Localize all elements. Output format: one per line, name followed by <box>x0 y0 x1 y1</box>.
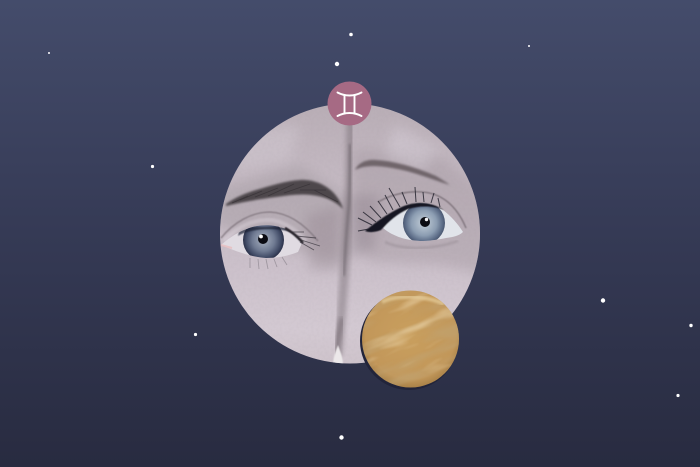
nose highlight <box>333 345 343 365</box>
skin shading <box>215 125 490 275</box>
right upper lash line <box>365 203 444 232</box>
venus planet <box>360 290 459 390</box>
left eye <box>221 212 320 269</box>
left brow <box>226 180 343 209</box>
skin grain <box>215 100 485 370</box>
center crease <box>336 118 351 360</box>
photo circle: two faces <box>215 100 490 370</box>
right eyelid crease <box>378 192 466 228</box>
icon: gemini symbol <box>338 92 362 116</box>
right brow <box>355 160 450 185</box>
gemini badge <box>328 82 372 126</box>
right eye <box>358 187 466 248</box>
left eyelid crease <box>221 212 318 241</box>
